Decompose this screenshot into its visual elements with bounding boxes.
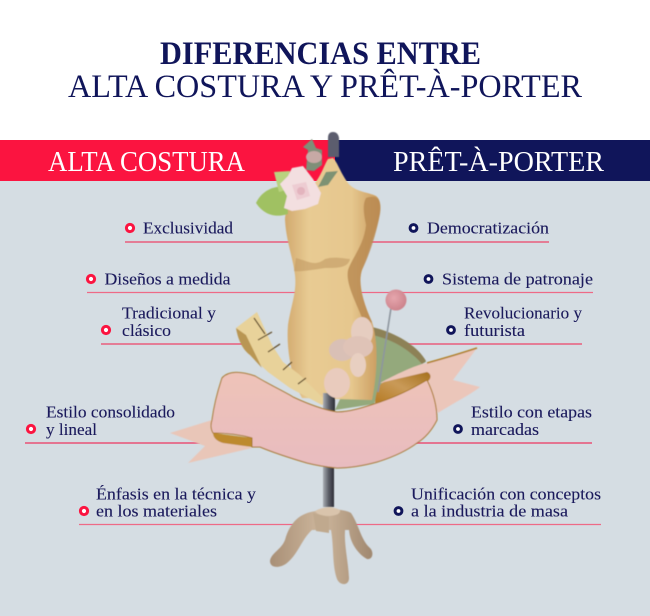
item: tradicional y clásico: clásico	[122, 321, 171, 340]
item: énfasis en la técnica: en los materiales	[96, 502, 217, 520]
item: tradicional y clásico	[101, 304, 245, 344]
torso	[285, 158, 380, 400]
item: énfasis en la técnica: Énfasis en la técnica y	[96, 484, 257, 504]
item: exclusividad: Exclusividad	[143, 218, 234, 238]
item: sistema de patronaje	[360, 270, 593, 292]
ribbon folds	[213, 372, 430, 447]
knob	[328, 132, 339, 157]
waist seam	[294, 258, 350, 271]
ribbon main	[211, 372, 437, 468]
rosebud	[303, 139, 322, 171]
green cushion	[335, 327, 426, 410]
item: estilo consolidado: y lineal	[46, 420, 97, 439]
title: DIFERENCIAS ENTRE	[160, 36, 481, 72]
header band: alta costura	[0, 140, 335, 181]
header band: prêt-à-porter	[335, 140, 650, 181]
item: unificación con conceptos: Unificación con conceptos	[411, 484, 601, 504]
left column: alta costura items	[25, 218, 296, 524]
illustration: dress form	[170, 132, 480, 584]
pole segment above ribbon	[323, 393, 335, 411]
item: énfasis en la técnica	[79, 484, 295, 524]
ribbon right tail	[380, 348, 480, 413]
flower	[280, 166, 321, 211]
torso shading	[348, 197, 380, 326]
item: estilo con etapas marcadas: marcadas	[471, 420, 539, 439]
item: revolucionario y futurista: Revolucionario y	[464, 304, 582, 322]
item: revolucionario y futurista: futurista	[464, 321, 525, 340]
item: unificación con conceptos: a la industria de masa	[411, 502, 568, 520]
header band: prêt-à-porter: PRÊT-À-PORTER	[393, 145, 605, 178]
item: exclusividad	[125, 218, 292, 242]
right column: prêt-à-porter items	[350, 218, 601, 524]
measuring tape	[236, 312, 327, 405]
title: ALTA COSTURA Y PRÊT-À-PORTER	[68, 68, 582, 105]
header band: alta costura: ALTA COSTURA	[48, 146, 245, 178]
item: revolucionario y futurista	[405, 304, 582, 344]
item: estilo consolidado: Estilo consolidado	[46, 402, 175, 422]
item: tradicional y clásico: Tradicional y	[122, 304, 217, 322]
item: estilo con etapas marcadas	[410, 402, 592, 443]
item: democratización	[368, 218, 550, 242]
item: estilo con etapas marcadas: Estilo con etapas	[471, 402, 592, 422]
item: diseños a medida	[87, 270, 296, 292]
item: unificación con conceptos	[350, 484, 601, 524]
item: estilo consolidado	[25, 402, 200, 443]
stand pole	[323, 460, 334, 507]
page background	[0, 181, 650, 616]
icon: tripod base	[270, 507, 372, 584]
item: diseños a medida: Diseños a medida	[104, 270, 231, 288]
dry petals	[324, 317, 373, 398]
item: democratización: Democratización	[427, 218, 550, 238]
title	[68, 36, 582, 105]
item: sistema de patronaje: Sistema de patronaje	[442, 270, 593, 288]
ribbon left tail	[170, 420, 252, 463]
pin	[378, 290, 406, 392]
leaves	[256, 171, 338, 216]
